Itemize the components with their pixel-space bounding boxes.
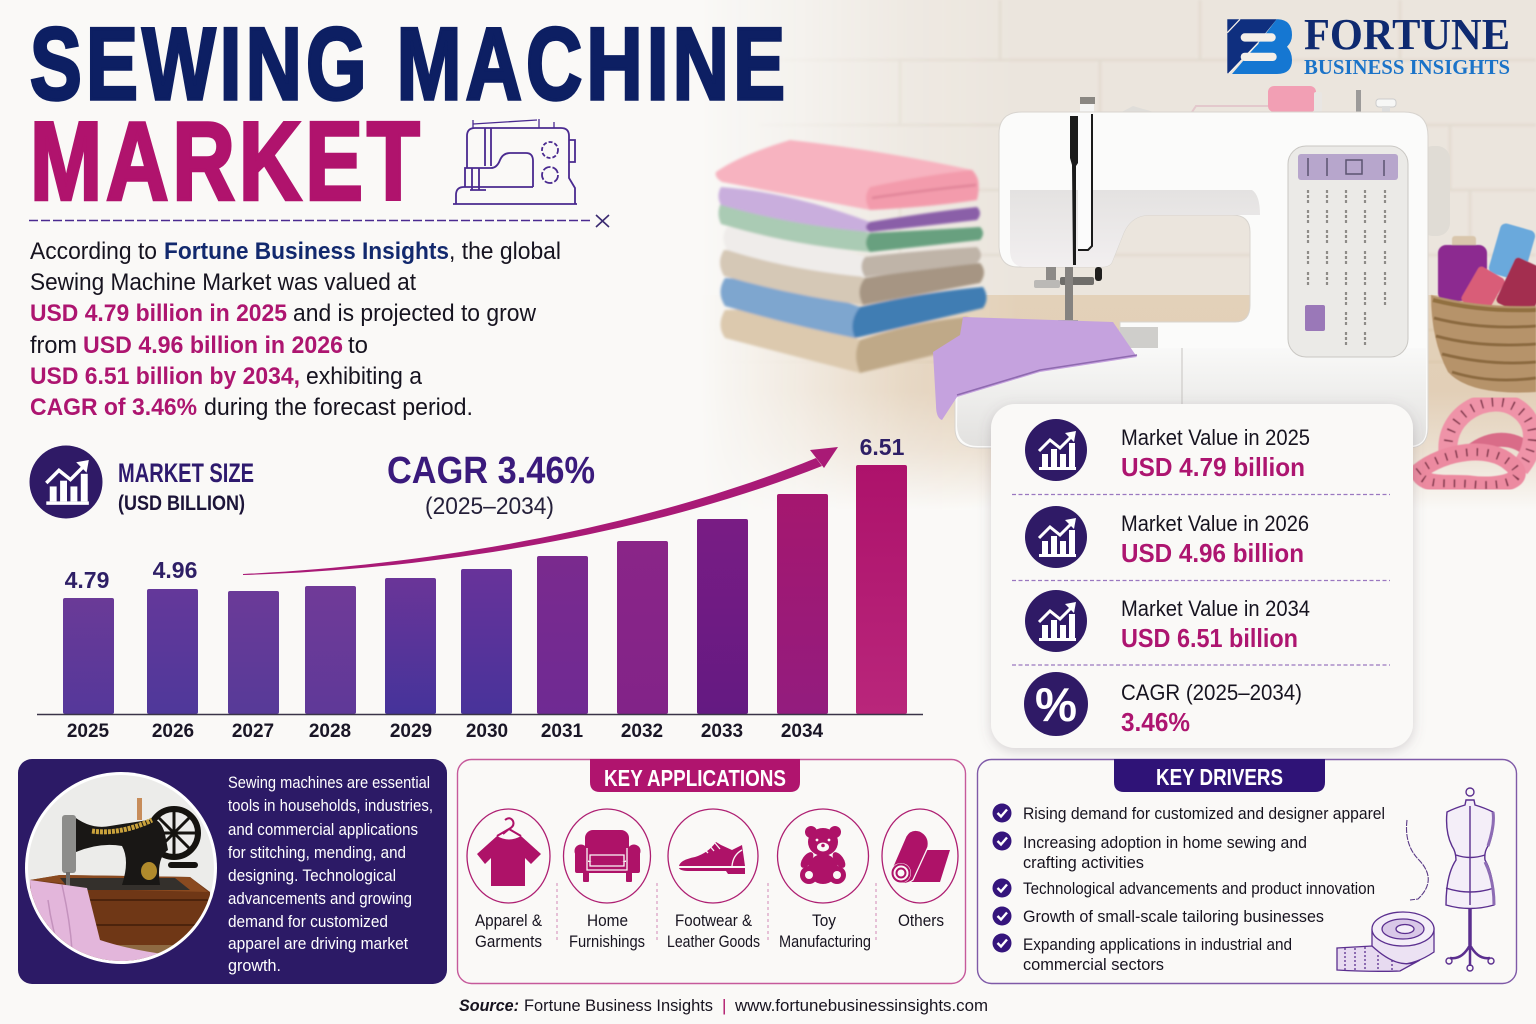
description text [228,773,433,975]
purple cloth [933,317,1137,420]
driver: home sewing: Increasing adoption in home sewing and [1023,833,1307,852]
driver: customized apparel: Rising demand for customized and designer apparel [1023,804,1385,823]
row: market value 2026 [1025,506,1309,568]
photo: white modern sewing machine [933,86,1450,448]
photo: folded fabric stack [716,140,986,373]
panel: market value card [991,404,1413,748]
year labels: 2031 [541,721,584,742]
control panel [1288,146,1408,357]
intro paragraph: According to [30,238,157,265]
intro paragraph: , the global [449,238,561,265]
icon: market size chart badge [30,446,102,518]
row: market value 2025: USD 4.79 billion [1121,452,1305,482]
driver: home sewing [992,832,1307,872]
intro paragraph: USD 6.51 billion by 2034, [30,363,300,390]
source line [459,996,988,1015]
heading tab: KEY APPLICATIONS [604,765,786,791]
value labels: 4.96 [153,557,197,583]
application: toy manufacturing: Toy [812,911,836,930]
bars [63,465,907,714]
photo: pink measuring tape [1418,402,1532,485]
driver: industrial applications [992,934,1292,974]
pink cloth [30,880,158,961]
panel: key drivers [978,759,1516,984]
value labels [65,434,905,593]
title [30,8,789,224]
row: market value 2026: USD 4.96 billion [1121,538,1304,568]
vintage machine body [72,815,168,885]
title line 1: SEWING MACHINE [30,8,789,122]
application: footwear: Footwear & [675,911,753,930]
row: market value 2034: USD 6.51 billion [1121,623,1298,653]
needle plate [1120,327,1158,348]
driver: innovation: Technological advancements and product innovation [1023,879,1375,898]
row: market value 2026: Market Value in 2026 [1121,511,1309,536]
machine body [955,112,1428,448]
value labels: 6.51 [860,434,905,460]
heading tab [590,759,800,792]
photo: vintage sewing machine [25,772,217,964]
year labels: 2025 [67,721,110,742]
application: others [882,809,958,930]
driver: industrial applications: commercial sectors [1023,955,1164,974]
intro paragraph: from [30,332,77,359]
blue fabric [720,278,986,338]
source line: Fortune Business Insights [524,996,713,1015]
application: home furnishings: Furnishings [569,932,645,951]
description text: for stitching, mending, and [228,843,406,862]
CAGR heading [387,450,595,520]
lilac fabric [718,187,980,232]
handwheel [1420,146,1450,236]
background photo: workspace with wall and table [700,0,1536,510]
row: CAGR: CAGR (2025–2034) [1121,680,1302,705]
year labels: 2029 [390,721,432,742]
row: CAGR: 3.46% [1121,707,1190,737]
market size heading: MARKET SIZE [118,458,254,488]
year labels: 2028 [309,721,351,742]
row: CAGR: % [1035,678,1077,731]
description text: advancements and growing [228,889,412,908]
heading tab [1114,759,1325,792]
axis [37,714,923,716]
heading tab: KEY DRIVERS [1156,764,1283,790]
title line 2: MARKET [30,100,424,224]
application: apparel: Apparel & [475,911,543,930]
intro paragraph [30,238,561,421]
bar chart: market size 2025 to 2034 [37,434,923,742]
intro paragraph: Sewing Machine Market was valued at [30,269,416,296]
application: others: Others [898,911,944,930]
dashed divider with scissors mark [29,215,609,227]
CAGR heading: (2025–2034) [425,493,554,520]
logo: Fortune Business Insights: BUSINESS INSIGHTS [1304,55,1510,79]
photo: thread basket [1431,222,1536,393]
year labels: 2027 [232,721,274,742]
logo mark [1227,19,1292,74]
needle bar [1070,116,1080,265]
row: CAGR [1024,672,1302,737]
value labels: 4.79 [65,567,109,593]
source line: Source: [459,996,519,1015]
source line: | [722,996,726,1015]
tan fabric [720,310,976,373]
year labels: 2030 [466,721,508,742]
icon: sewing machine outline [453,119,577,204]
intro paragraph: CAGR of 3.46% [30,394,197,421]
application: toy manufacturing [778,809,871,951]
vintage machine wheel [150,809,198,857]
driver: industrial applications: Expanding applications in industrial and [1023,935,1292,954]
growth arrow [243,447,838,575]
application: apparel: Garments [475,932,542,951]
application: home furnishings: Home [587,911,628,930]
description text: demand for customized [228,912,388,931]
application: toy manufacturing: Manufacturing [779,932,871,951]
white fabric [724,227,981,277]
application: footwear: Leather Goods [667,932,760,951]
intro paragraph: and is projected to grow [293,300,537,327]
description text: designing. Technological [228,866,396,885]
intro paragraph: to [348,332,368,359]
row: market value 2025: Market Value in 2025 [1121,425,1310,450]
year labels: 2026 [152,721,194,742]
CAGR heading: CAGR 3.46% [387,450,595,492]
description text: apparel are driving market [228,934,408,953]
year labels: 2033 [701,721,743,742]
icon: thread curve [1406,820,1428,900]
intro paragraph: during the forecast period. [204,394,473,421]
green fabric [718,203,983,252]
intro paragraph: exhibiting a [306,363,423,390]
description text: Sewing machines are essential [228,773,430,792]
spool and top posts [1080,86,1396,115]
icon: dress form [1446,788,1494,971]
driver: home sewing: crafting activities [1023,853,1144,872]
logo: Fortune Business Insights [1227,10,1510,79]
beige fabric [720,250,984,305]
year labels: 2034 [781,721,824,742]
row: market value 2025 [1025,419,1310,482]
logo: Fortune Business Insights: FORTUNE [1304,10,1510,59]
icon: rolled measuring tape [1337,912,1434,972]
source line: www.fortunebusinessinsights.com [734,996,988,1015]
intro paragraph: USD 4.79 billion in 2025 [30,300,287,327]
description text: growth. [228,956,281,975]
intro paragraph: USD 4.96 billion in 2026 [83,332,343,359]
description text: tools in households, industries, [228,796,433,815]
year labels: 2032 [621,721,663,742]
driver: tailoring: Growth of small-scale tailoring businesses [1023,907,1324,926]
application: home furnishings [564,809,650,951]
market size heading [118,458,254,515]
application: apparel [467,809,550,951]
row: market value 2034 [1025,590,1310,653]
description text: and commercial applications [228,820,418,839]
market size heading: (USD BILLION) [118,492,245,515]
pink fabric [716,140,979,210]
application: footwear [667,809,760,951]
intro paragraph: Fortune Business Insights [164,238,449,265]
panel: key applications [458,759,966,984]
presser foot [1034,267,1102,335]
row: market value 2034: Market Value in 2034 [1121,596,1310,621]
panel: description [18,759,447,984]
year labels [67,721,824,742]
